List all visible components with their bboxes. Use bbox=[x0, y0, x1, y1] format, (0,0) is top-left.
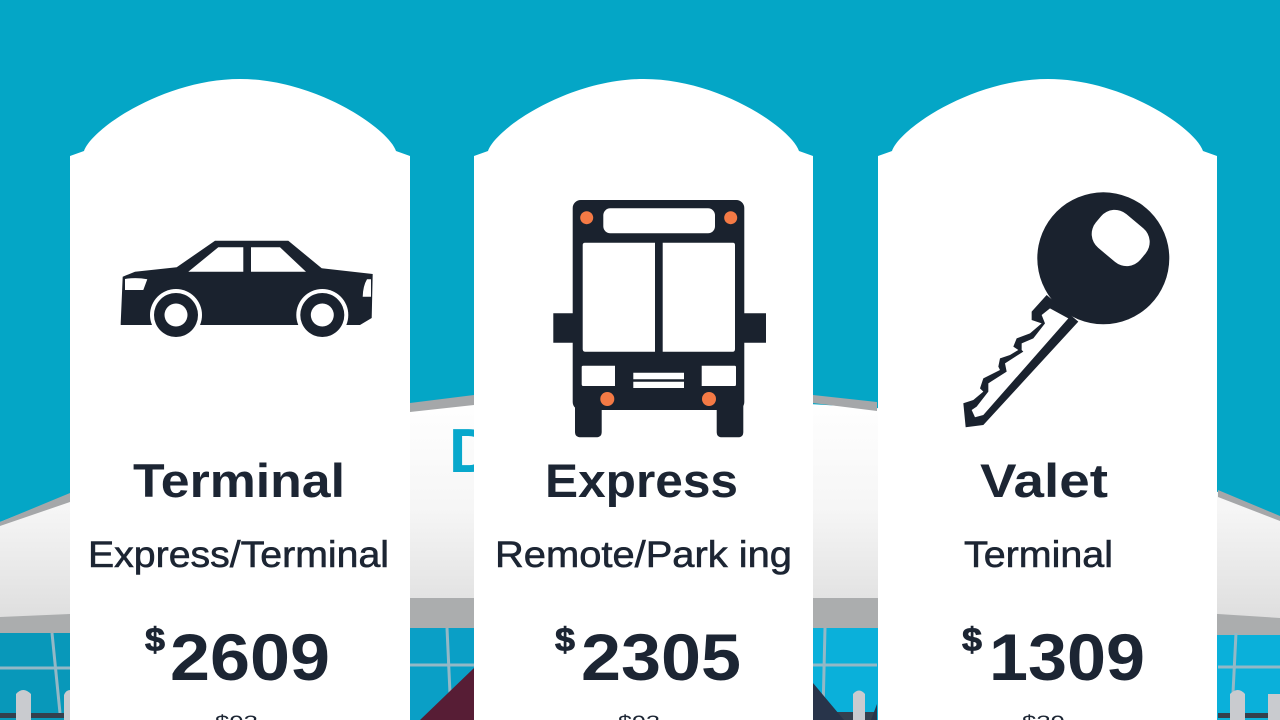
terminal roof bbox=[0, 394, 1280, 620]
panel: express parking bbox=[474, 79, 813, 720]
glass facade left bbox=[0, 628, 410, 720]
icon: key bbox=[963, 192, 1169, 427]
glass facade centre bbox=[410, 625, 813, 720]
glass facade right bbox=[813, 625, 1280, 720]
front wheel bbox=[145, 289, 207, 341]
panel: valet parking bbox=[878, 79, 1217, 720]
car body bbox=[121, 241, 373, 325]
bus mirrors bbox=[553, 313, 766, 343]
subheading: Express/Terminal bbox=[88, 534, 389, 575]
roof edge bbox=[0, 395, 1280, 526]
car windows bbox=[188, 247, 306, 272]
card shape bbox=[70, 79, 410, 720]
heading: Terminal bbox=[133, 454, 345, 507]
bus body bbox=[573, 200, 744, 410]
window mullions bbox=[0, 628, 1280, 715]
heading: Express bbox=[545, 454, 738, 507]
rear wheel bbox=[291, 289, 353, 341]
destination sign bbox=[603, 208, 715, 233]
price: 1309 bbox=[989, 620, 1145, 694]
panel: terminal parking bbox=[70, 79, 410, 720]
bus wheels bbox=[575, 405, 743, 437]
navy aircraft tail bbox=[813, 683, 877, 720]
facade band bbox=[0, 598, 1280, 635]
windshield bbox=[583, 243, 735, 352]
bollards bbox=[16, 690, 1280, 720]
subheading: Remote/Park ing bbox=[495, 534, 792, 575]
key head bbox=[1037, 192, 1169, 324]
dollar sign: $ bbox=[555, 621, 575, 658]
orange lights bbox=[580, 211, 737, 406]
car lights bbox=[125, 278, 371, 297]
dollar sign: $ bbox=[962, 621, 982, 658]
key blade cutout bbox=[972, 308, 1068, 417]
card shape bbox=[878, 79, 1217, 720]
background: airport terminal building bbox=[0, 394, 1280, 720]
grille bbox=[633, 373, 684, 388]
key hole bbox=[1084, 203, 1157, 273]
subheading: Terminal bbox=[964, 534, 1113, 575]
price: 2305 bbox=[581, 620, 741, 694]
icon: car bbox=[121, 241, 373, 341]
icon: bus bbox=[553, 200, 766, 437]
card shape bbox=[474, 79, 813, 720]
key blade bbox=[963, 295, 1078, 427]
headlights bbox=[582, 366, 736, 386]
price: 2609 bbox=[170, 620, 330, 694]
maroon aircraft tail bbox=[420, 668, 474, 720]
ground strip bbox=[0, 712, 1280, 720]
terminal sign letter: D bbox=[449, 417, 494, 486]
heading: Valet bbox=[980, 454, 1108, 507]
dollar sign: $ bbox=[145, 621, 165, 658]
